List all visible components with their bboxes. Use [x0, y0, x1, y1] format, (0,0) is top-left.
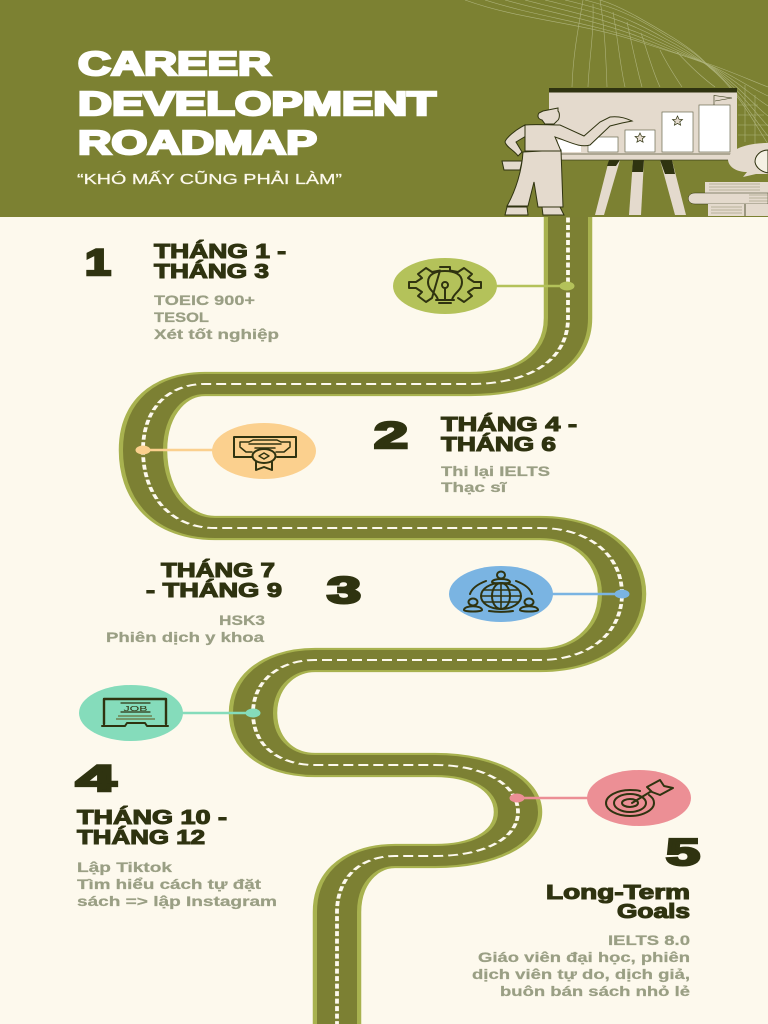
winding road	[143, 210, 622, 1024]
heading 2: THÁNG 6	[441, 433, 556, 456]
icon: global network	[449, 566, 553, 622]
title	[78, 45, 436, 161]
illustration: presenter with chart board	[502, 88, 768, 216]
details 4: Tìm hiểu cách tự đặt	[77, 876, 261, 892]
light bulb and books	[688, 143, 768, 216]
heading 2	[441, 413, 577, 456]
connector 3	[550, 590, 630, 598]
details 1: Xét tốt nghiệp	[154, 326, 279, 342]
heading 4: THÁNG 12	[77, 826, 205, 849]
connector 2	[136, 446, 215, 454]
heading 3: THÁNG 7	[161, 559, 275, 582]
heading 1: THÁNG 1 -	[154, 240, 286, 263]
details 1: TOEIC 900+	[154, 292, 255, 308]
heading 3	[146, 559, 282, 602]
number 4: 4	[76, 758, 117, 799]
connector 4	[180, 708, 260, 718]
title: DEVELOPMENT	[78, 85, 436, 122]
header band	[0, 0, 768, 217]
details 5: Giáo viên đại học, phiên	[478, 949, 690, 965]
number 3: 3	[327, 570, 361, 611]
icon: certificate	[212, 423, 316, 479]
details 5: IELTS 8.0	[608, 932, 690, 948]
details 4: sách => lập Instagram	[77, 893, 277, 909]
title: CAREER	[78, 45, 271, 82]
icon: gear bulb	[393, 258, 497, 314]
details 2	[441, 463, 550, 495]
details 3	[106, 612, 265, 645]
presenter	[502, 108, 632, 215]
details 4: Lập Tiktok	[77, 859, 172, 875]
details 5: buôn bán sách nhỏ lẻ	[500, 983, 690, 999]
details 5	[472, 932, 690, 999]
milestone 5	[472, 770, 700, 999]
details 3: HSK3	[219, 612, 265, 628]
details 1	[154, 292, 279, 342]
heading 5	[546, 882, 690, 923]
details 2: Thi lại IELTS	[441, 463, 550, 479]
heading 5: Goals	[617, 901, 690, 923]
icon: job laptop: JOB	[124, 704, 148, 713]
details 5: dịch viên tự do, dịch giả,	[472, 966, 690, 982]
heading 2: THÁNG 4 -	[441, 413, 577, 436]
heading 4: THÁNG 10 -	[77, 806, 227, 829]
milestone 2	[136, 413, 577, 495]
milestone 4	[76, 685, 277, 909]
number 2: 2	[374, 415, 408, 456]
decorative mesh	[465, 0, 768, 144]
heading 4	[77, 806, 227, 849]
connector 1	[490, 282, 574, 290]
subtitle: “KHÓ MẤY CŨNG PHẢI LÀM”	[77, 171, 342, 188]
board	[549, 88, 744, 160]
number 5: 5	[666, 832, 700, 873]
heading 1: THÁNG 3	[154, 260, 269, 283]
heading 5: Long-Term	[546, 882, 690, 904]
details 2: Thạc sĩ	[441, 479, 507, 495]
connector 5	[510, 794, 592, 802]
board legs	[595, 160, 686, 215]
details 3: Phiên dịch y khoa	[106, 629, 264, 645]
details 4	[77, 859, 277, 909]
icon: job laptop	[79, 685, 183, 741]
details 1: TESOL	[154, 309, 210, 325]
heading 3: - THÁNG 9	[146, 579, 282, 602]
title: ROADMAP	[78, 124, 317, 161]
milestone 1	[85, 240, 574, 342]
icon: target with arrow	[587, 770, 691, 826]
heading 1	[154, 240, 286, 283]
milestone 3	[106, 559, 630, 645]
number 1: 1	[85, 242, 111, 283]
